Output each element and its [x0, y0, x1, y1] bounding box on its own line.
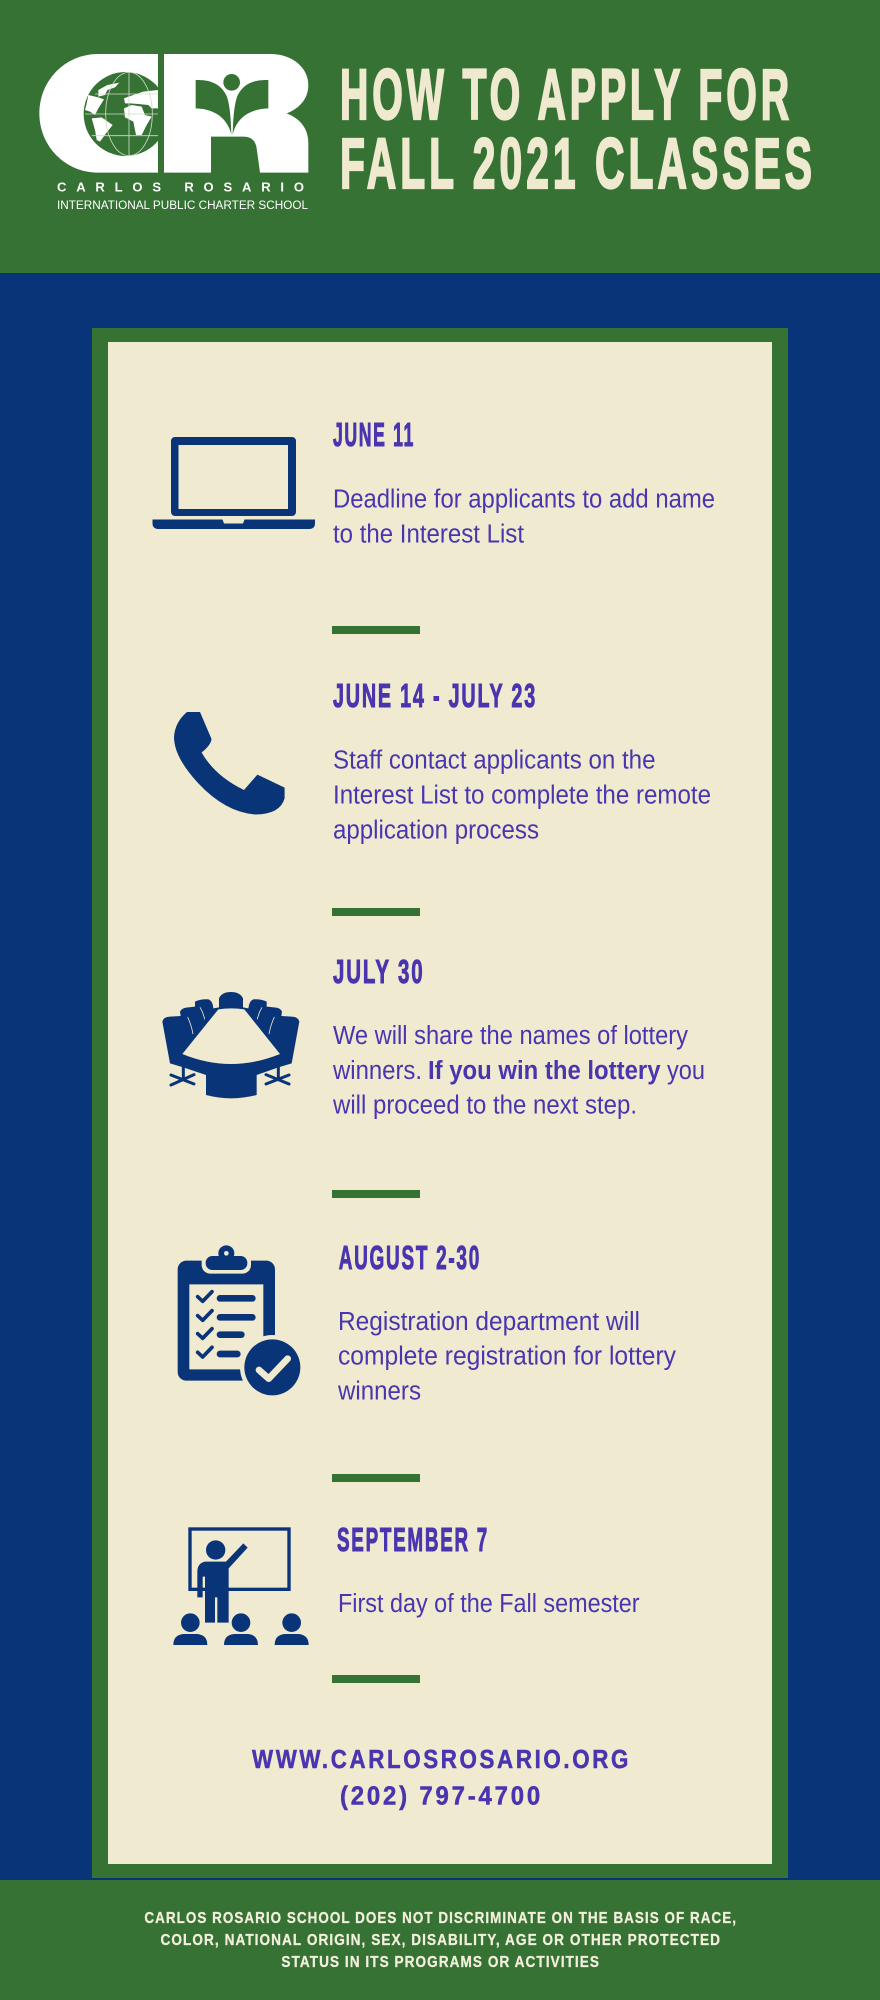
description: We will share the names of lottery	[333, 1022, 688, 1050]
description	[333, 486, 715, 548]
description: application process	[333, 816, 539, 844]
heading: JUNE 11	[333, 416, 415, 453]
description: If you win the lottery	[428, 1057, 661, 1085]
description	[332, 1022, 705, 1120]
non-discrimination notice: CARLOS ROSARIO SCHOOL DOES NOT DISCRIMINATE ON THE BASIS OF RACE,	[144, 1910, 737, 1927]
heading: SEPTEMBER 7	[337, 1521, 489, 1558]
header band	[0, 0, 880, 273]
description: complete registration for lottery	[338, 1343, 676, 1371]
heading: AUGUST 2-30	[339, 1239, 481, 1276]
main panel frame	[92, 328, 788, 1878]
title	[340, 56, 816, 204]
icon: clipboard with checkmark	[178, 1245, 305, 1400]
description: Deadline for applicants to add name	[333, 486, 715, 514]
description: Registration department will	[338, 1308, 640, 1336]
contact details: (202) 797-4700	[340, 1783, 543, 1811]
step 4: August 2-30	[178, 1239, 676, 1406]
description: will proceed to the next step.	[332, 1092, 637, 1120]
description	[337, 1308, 676, 1406]
icon: laptop	[152, 437, 315, 529]
logo mark: CR with globe and figure	[39, 54, 308, 173]
description	[333, 746, 711, 844]
contact details	[252, 1746, 631, 1811]
step 2: June 14 - July 23	[174, 677, 711, 844]
non-discrimination notice: COLOR, NATIONAL ORIGIN, SEX, DISABILITY, AGE OR OTHER PROTECTED	[160, 1932, 721, 1949]
step 5: September 7	[173, 1521, 640, 1645]
non-discrimination notice: STATUS IN ITS PROGRAMS OR ACTIVITIES	[281, 1954, 600, 1971]
footer band	[0, 1880, 880, 2000]
heading: JULY 30	[333, 953, 424, 990]
non-discrimination notice	[144, 1910, 737, 1971]
description: Interest List to complete the remote	[333, 782, 711, 810]
description: First day of the Fall semester	[338, 1590, 640, 1618]
icon: phone	[174, 712, 285, 814]
contact details: WWW.CARLOSROSARIO.ORG	[252, 1746, 631, 1774]
description: to the Interest List	[333, 520, 524, 548]
description: you	[667, 1057, 705, 1085]
heading: JUNE 14 - JULY 23	[333, 677, 537, 714]
icon: teacher and students	[173, 1529, 309, 1645]
description: Staff contact applicants on the	[333, 746, 656, 774]
description: winners	[337, 1378, 421, 1406]
logo name: CARLOS ROSARIO	[57, 180, 304, 195]
description: winners.	[332, 1057, 422, 1085]
logo: Carlos Rosario	[39, 54, 309, 212]
logo subtitle: INTERNATIONAL PUBLIC CHARTER SCHOOL	[57, 200, 309, 212]
icon: conference table	[162, 992, 299, 1098]
step 1: June 11	[152, 416, 715, 548]
step 3: July 30	[162, 953, 705, 1120]
